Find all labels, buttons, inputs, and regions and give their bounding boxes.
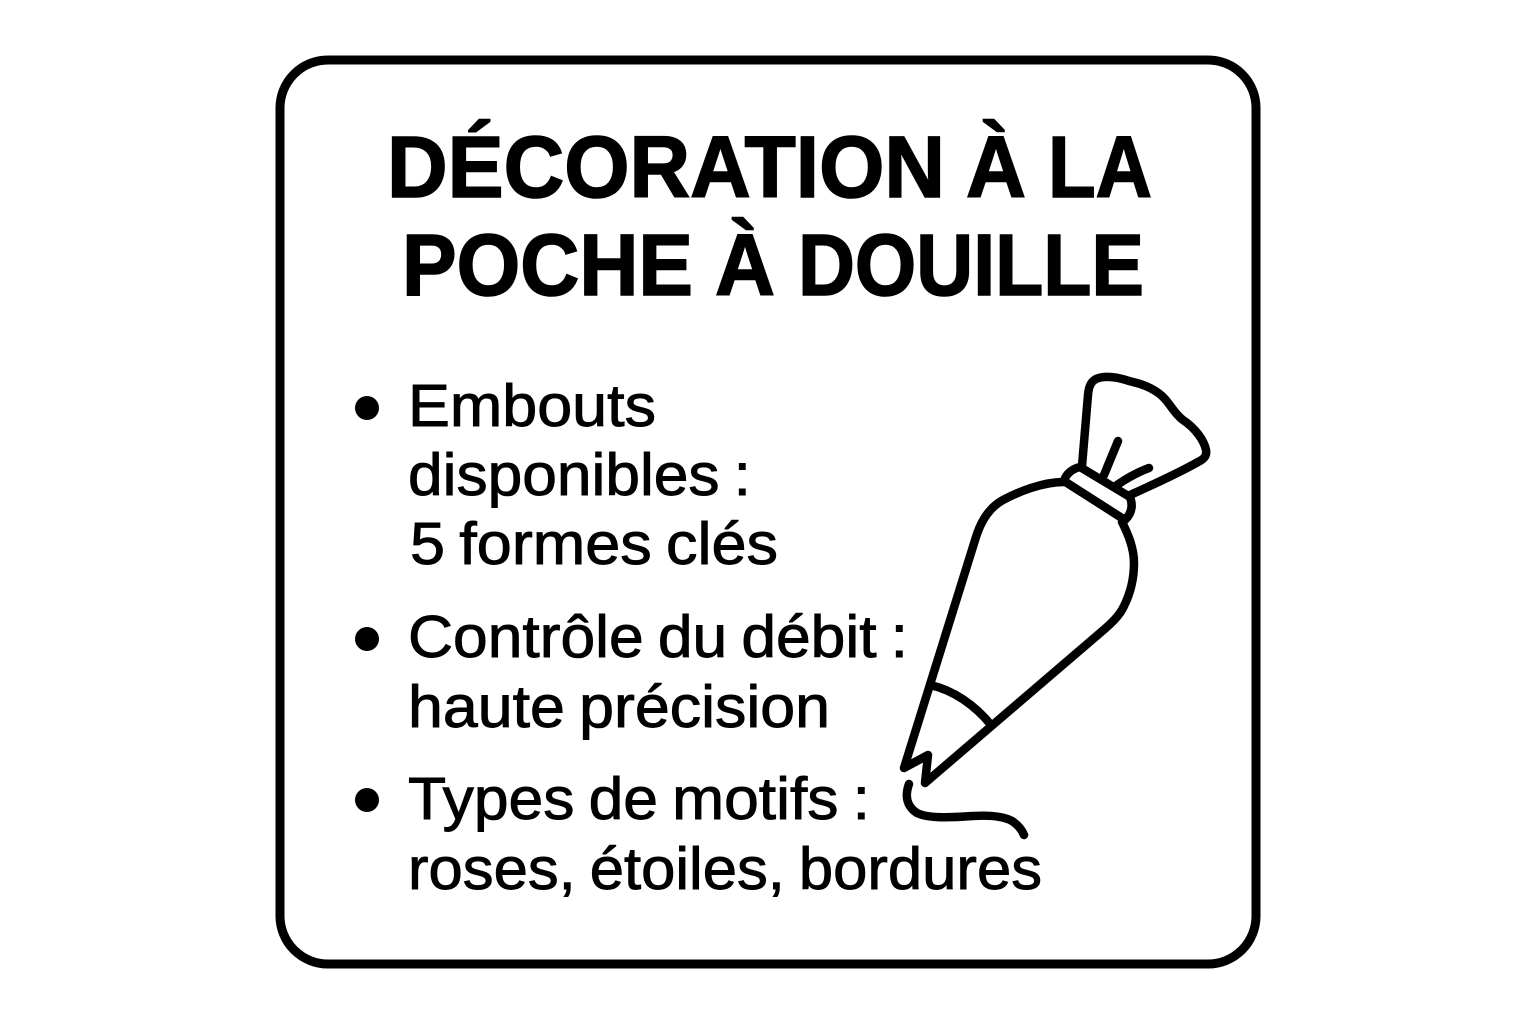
bullet: embouts: disponibles : [408,442,751,508]
bullet: contrôle du débit: Contrôle du débit : [408,604,908,670]
title: DÉCORATION [387,119,945,216]
bag pleats [1104,441,1149,485]
title: LA [1048,119,1152,216]
bullet: embouts: 5 formes clés [410,511,778,577]
icon: piping bag [904,377,1206,835]
panel: card frame [280,60,1256,964]
bag twisted top [1082,377,1206,495]
bullet: embouts [355,373,778,577]
title: À [966,119,1026,216]
title: DOUILLE [798,217,1144,314]
title [387,119,1152,314]
bag body [904,482,1134,783]
bullet: types de motifs: roses, étoiles, bordures [408,836,1042,902]
bullet: types de motifs: Types de motifs : [408,766,870,832]
bullet: contrôle du débit [355,604,908,740]
bullet: embouts: Embouts [408,373,656,439]
bag collar [1064,467,1132,520]
bullet: contrôle du débit: haute précision [408,674,830,740]
title: À [715,217,775,314]
title: POCHE [402,217,693,314]
icing line [907,784,1024,835]
nozzle line [930,685,991,725]
bullet: types de motifs [355,766,1042,902]
